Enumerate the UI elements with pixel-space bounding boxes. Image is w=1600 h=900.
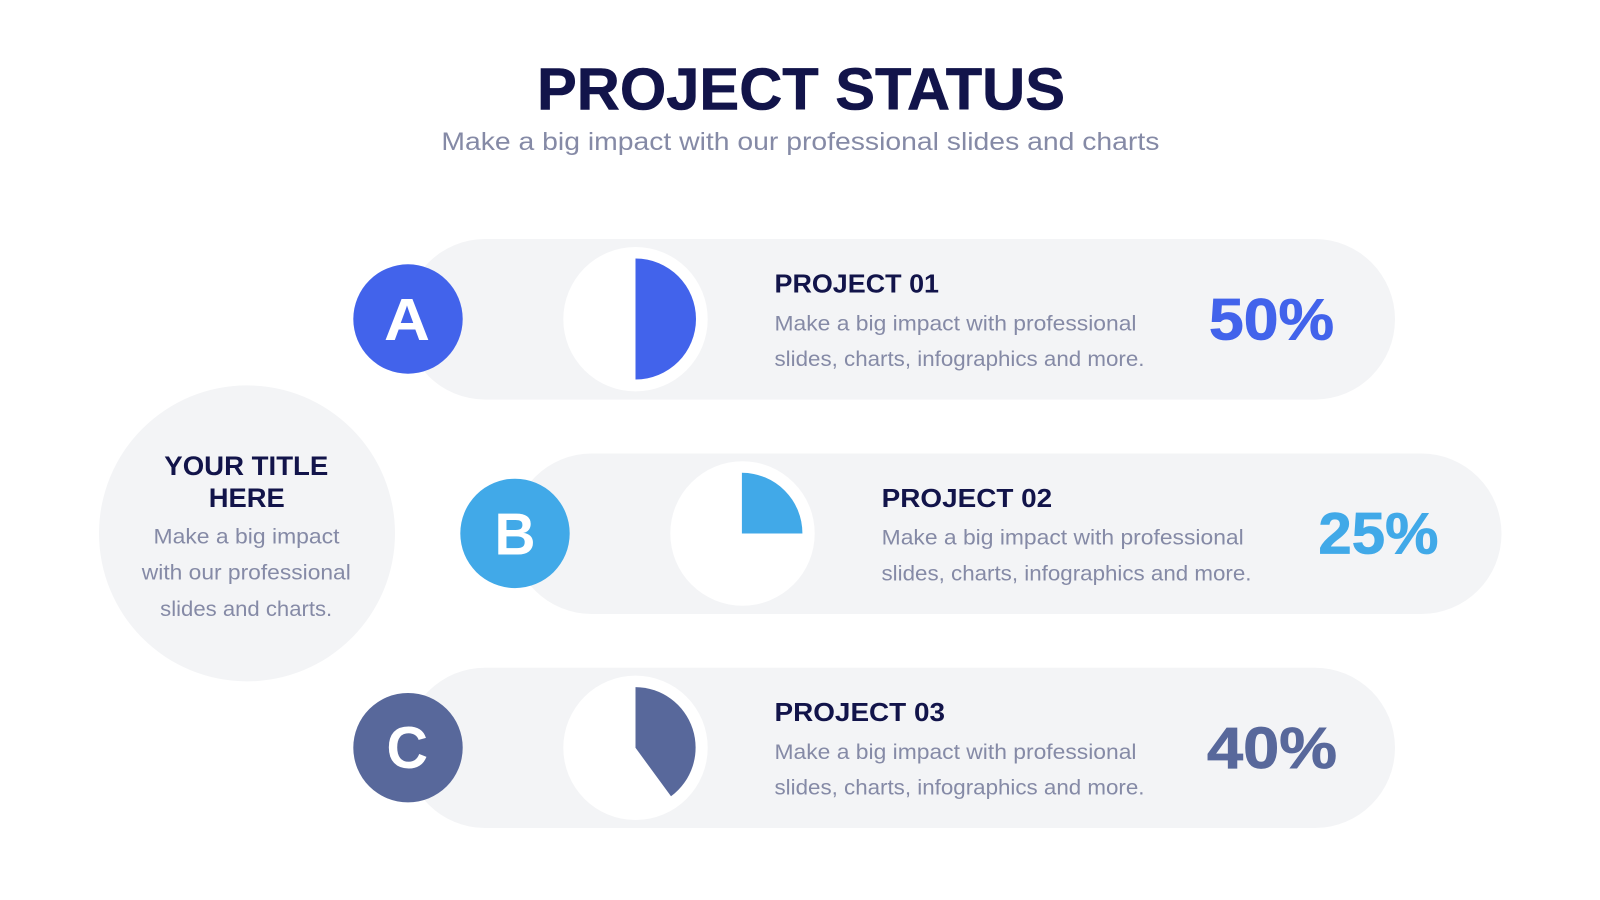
pie chart 25%	[670, 461, 815, 606]
summary text: slides and charts.	[160, 597, 332, 621]
badge A: A	[384, 287, 430, 353]
project 01 description	[774, 311, 1144, 371]
summary heading: YOUR TITLE	[164, 451, 328, 481]
project 01 description: Make a big impact with professional	[774, 311, 1136, 335]
subtitle: Make a big impact with our professional slides and charts	[441, 128, 1159, 156]
project 03 description	[774, 740, 1144, 800]
panel: project 02	[460, 454, 1501, 614]
project 01 description: slides, charts, infographics and more.	[774, 347, 1144, 371]
badge C: C	[386, 715, 428, 781]
pie chart 40%	[563, 676, 708, 820]
value 50%: 50%	[1209, 287, 1334, 352]
project 01 heading: PROJECT 01	[774, 269, 939, 299]
summary text	[141, 525, 351, 621]
project 02 description: Make a big impact with professional	[882, 526, 1244, 550]
project 02 heading: PROJECT 02	[882, 483, 1052, 513]
summary heading: HERE	[209, 483, 285, 513]
project 03 heading: PROJECT 03	[774, 697, 945, 727]
project 03 description: slides, charts, infographics and more.	[774, 776, 1144, 800]
summary text: Make a big impact	[154, 525, 340, 549]
badge B: B	[494, 501, 536, 567]
project 03 description: Make a big impact with professional	[774, 740, 1136, 764]
badge C	[353, 693, 463, 802]
panel: project 03	[353, 668, 1395, 828]
panel: project 01	[353, 239, 1395, 400]
panel: left summary circle	[99, 385, 395, 681]
title: PROJECT STATUS	[537, 56, 1065, 122]
project 02 description	[882, 526, 1252, 586]
summary heading	[164, 451, 328, 513]
pie chart 50%	[563, 247, 708, 391]
value 25%: 25%	[1318, 502, 1438, 567]
badge A	[353, 264, 463, 374]
badge B	[460, 479, 570, 588]
value 40%: 40%	[1207, 716, 1337, 781]
summary text: with our professional	[141, 561, 351, 585]
project 02 description: slides, charts, infographics and more.	[882, 562, 1252, 586]
